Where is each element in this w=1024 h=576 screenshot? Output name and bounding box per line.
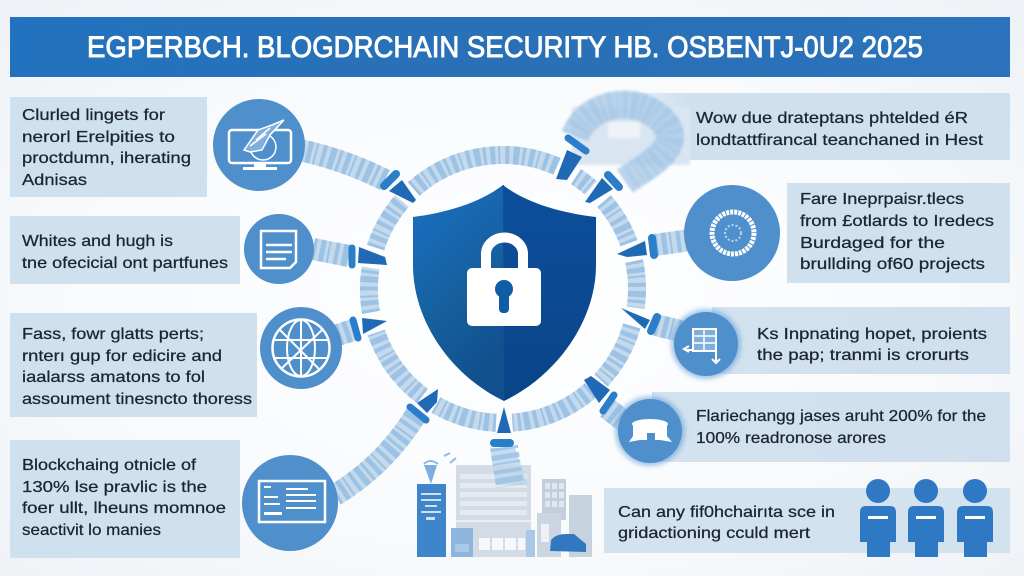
panel: left 3: assoument tinesncto thoress [22,391,252,408]
panel: right 1: londtattfirancal teanchaned in Hest [696,132,984,149]
person 2 [908,479,944,557]
panel: right 3 [712,307,1010,374]
panel: right 5: Can any fif0hchairıta sce in [618,504,835,521]
panel: left 4 [10,440,240,558]
panel: right 1: Wow due drateptans phtelded éR [696,110,968,127]
panel: left 4: Blockchaing otnicle of [22,457,197,474]
circle icon: form [242,455,338,551]
circle icon: target [684,185,780,281]
title banner [10,17,1010,77]
panel: right 5 [604,488,1010,553]
icon: people group [860,479,993,557]
pointer end caps [352,138,657,443]
panel: left 4: 130% lse pravlic is the [22,479,207,496]
panel: right 2: Burdaged for the [800,235,945,252]
title banner: EGPERBCH. BLOGDRCHAIN SECURITY HB. OSBENTJ-0U2 2025 [87,31,923,64]
person 3 [957,479,993,557]
circle icon: table with arrows [671,309,741,379]
panel: left 1 [10,97,207,197]
panel: left 2: Whites and hugh is [22,233,173,250]
panel: right 2: brullding of60 projects [800,256,985,273]
panel: right 1 [617,93,1010,160]
panel: right 2: Fare Ineprpaisr.tlecs [800,191,964,208]
panel: left 1: nerorl Erelpities to [22,129,175,146]
panel: left 3 [10,313,257,417]
padlock [467,238,541,326]
pointer wedges [358,150,650,433]
security ring [369,155,637,423]
panel: left 4: foer ullt, lheuns momnoe [22,500,226,517]
icon: city skyline [417,453,592,557]
panel: right 3: Ks Inpnating hopet, proients [757,326,987,343]
connectors [300,105,690,495]
circle icon: drum [615,396,685,466]
panel: left 3: rnterı gup for edicire and [22,348,222,365]
circle icon: monitor [213,99,305,191]
panel: left 1: Clurled lingets for [22,107,166,124]
central shield with padlock [413,185,596,401]
panel: right 2 [787,183,1010,283]
panel: right 3: the pap; tranmi is crorurts [757,347,969,364]
panel: right 4: 100% readronose arores [696,430,886,447]
circle icon: document [244,214,314,284]
panel: right 5: gridactioning cculd mert [618,525,811,542]
panel: left 3: iaalarss amatons to fol [22,369,205,386]
person 1 [860,479,896,557]
panel: left 1: proctdumn, iherating [22,150,191,167]
panel: right 4: Flariechangg jases aruht 200% for the [696,408,986,425]
panel: left 3: Fass, fowr glatts perts; [22,326,204,343]
panel: left 2 [10,216,240,284]
panel: right 4 [652,392,1010,462]
panel: right 2: from £otlards to Iredecs [800,213,994,230]
panel: left 2: tne ofecicial ont partfunes [22,255,228,272]
panel: left 1: Adnisas [22,172,87,189]
panel: left 4: seactivit lo manies [22,522,161,539]
circle icon: globe [260,307,342,389]
